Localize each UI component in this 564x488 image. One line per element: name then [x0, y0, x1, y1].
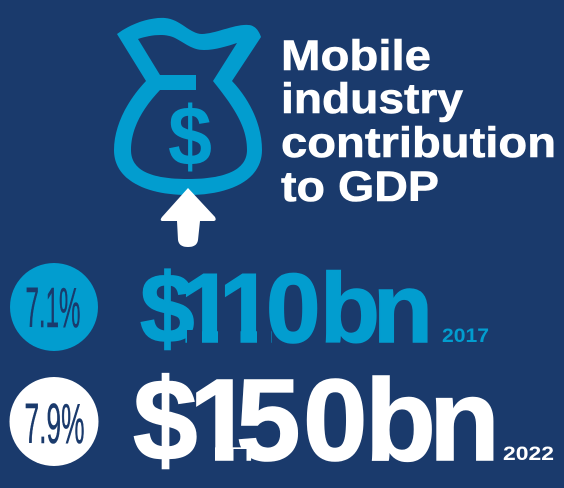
badge: 7.1%	[10, 263, 98, 351]
badge: 7.1%: 7.1%	[26, 276, 80, 340]
icon: up arrow	[161, 188, 216, 247]
year: 2017: 2017	[442, 325, 489, 347]
title: industry	[281, 75, 463, 123]
icon: dollar sign: $	[168, 89, 212, 183]
title: to GDP	[281, 163, 439, 211]
badge: 7.9%: 7.9%	[24, 392, 84, 456]
title: contribution	[281, 119, 556, 167]
stat: $150bn: $150bn	[133, 355, 500, 485]
badge: 7.9%	[10, 377, 98, 466]
icon: money bag	[114, 18, 262, 195]
title: Mobile	[281, 32, 431, 80]
stat: $110bn: $110bn	[140, 253, 433, 363]
year: 2022: 2022	[503, 444, 554, 465]
title	[281, 32, 556, 211]
